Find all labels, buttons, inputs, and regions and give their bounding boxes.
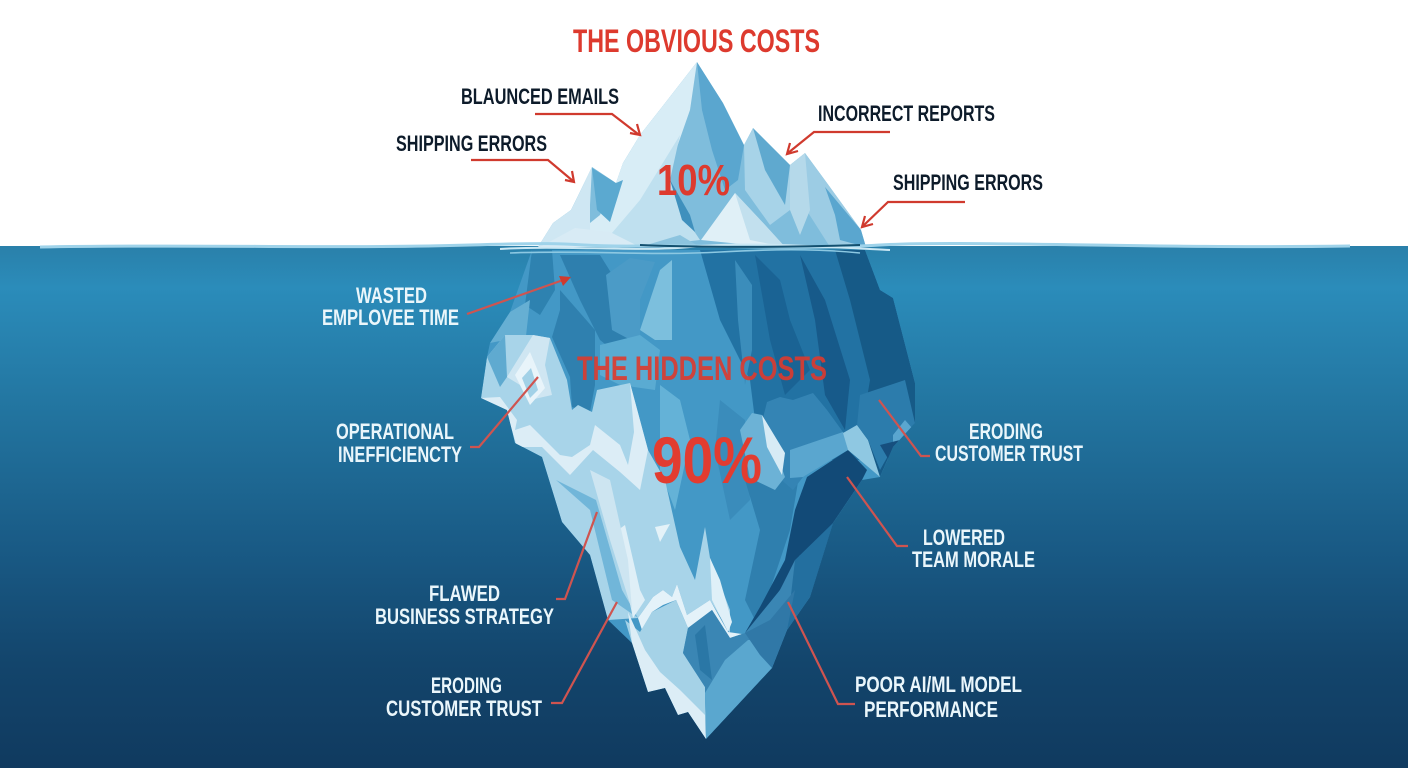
callout: lowered team morale: TEAM MORALE xyxy=(912,547,1035,572)
callout: incorrect reports xyxy=(787,101,995,154)
callout: lowered team morale: LOWERED xyxy=(923,525,1005,550)
callout: wasted employee time: WASTED xyxy=(356,283,427,308)
callout: eroding customer trust right xyxy=(879,400,1083,466)
callout: eroding customer trust right: ERODING xyxy=(969,419,1043,444)
callout: flawed business strategy: BUSINESS STRATEGY xyxy=(375,604,554,629)
title: the hidden costs: THE HIDDEN COSTS xyxy=(577,350,827,388)
iceberg above water xyxy=(530,60,870,250)
right shelf xyxy=(764,393,848,483)
title: the obvious costs: THE OBVIOUS COSTS xyxy=(573,23,820,59)
water surface line xyxy=(40,243,1350,253)
callout: flawed business strategy: FLAWED xyxy=(429,581,500,606)
lower center blue xyxy=(745,480,798,618)
callout: shipping errors right xyxy=(862,170,1043,227)
callout: poor ai/ml model performance: PERFORMANCE xyxy=(864,697,998,722)
callout: incorrect reports: INCORRECT REPORTS xyxy=(818,101,995,126)
callout: operational inefficiency xyxy=(336,377,538,467)
callout: eroding customer trust left: ERODING xyxy=(431,673,502,698)
callout: eroding customer trust left: CUSTOMER TRUST xyxy=(386,696,542,721)
stat: 10 percent: 10% xyxy=(657,156,730,205)
callout: shipping errors right: SHIPPING ERRORS xyxy=(893,170,1043,195)
callout: flawed business strategy xyxy=(375,512,597,629)
callout: lowered team morale xyxy=(847,477,1035,572)
background: ocean xyxy=(0,246,1408,768)
left shelf xyxy=(481,335,730,633)
background: sky xyxy=(0,0,1408,246)
callout: poor ai/ml model performance: POOR AI/ML MODEL xyxy=(855,672,1022,697)
callout: wasted employee time xyxy=(322,276,571,330)
callout: shipping errors left xyxy=(396,131,574,182)
upper left facets xyxy=(525,250,555,315)
dark crescent xyxy=(745,450,867,633)
stat: 90 percent: 90% xyxy=(652,423,762,497)
callout: blaunced emails: BLAUNCED EMAILS xyxy=(461,84,619,109)
lower left pale body xyxy=(556,480,638,618)
bottom xyxy=(625,600,706,739)
callout: wasted employee time: EMPLOVEE TIME xyxy=(322,305,459,330)
right dark side xyxy=(700,250,915,460)
callout: operational inefficiency: INEFFICIENCTY xyxy=(338,442,462,467)
callout: eroding customer trust right: CUSTOMER TRUST xyxy=(935,441,1083,466)
callout: shipping errors left: SHIPPING ERRORS xyxy=(396,131,547,156)
callout: operational inefficiency: OPERATIONAL xyxy=(336,419,454,444)
callout: blaunced emails xyxy=(461,84,640,135)
callout: eroding customer trust left xyxy=(386,602,617,721)
iceberg below water xyxy=(470,245,930,745)
central light streaks xyxy=(660,385,690,510)
callout: poor ai/ml model performance xyxy=(788,602,1022,722)
